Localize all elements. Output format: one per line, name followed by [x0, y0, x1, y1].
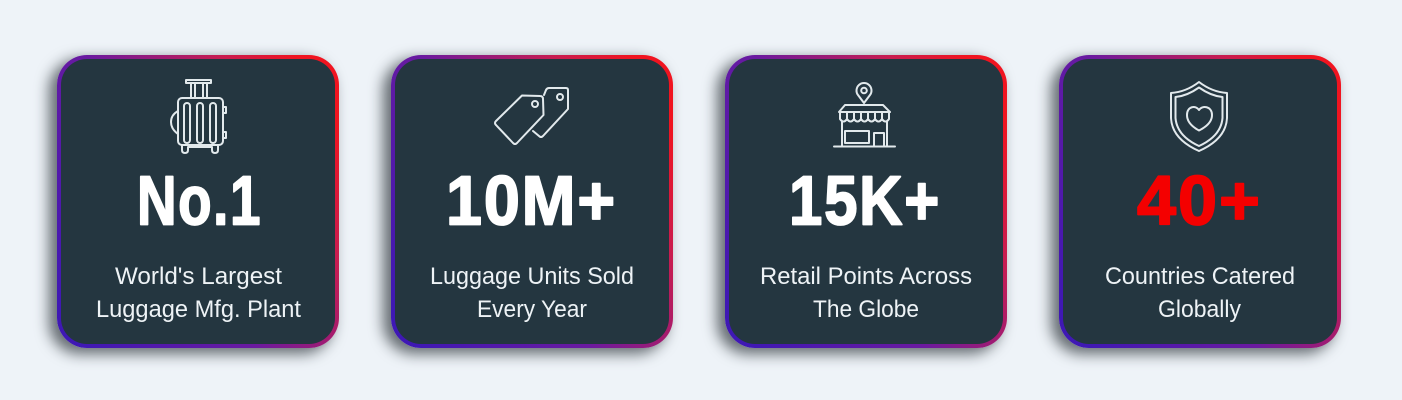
description: Globally	[1158, 296, 1241, 323]
stat: 15K+: 15K+	[789, 162, 941, 240]
card frame	[1059, 55, 1341, 348]
icon: price tags	[495, 88, 568, 144]
icon: suitcase	[171, 80, 226, 153]
icon: store with pin	[834, 83, 895, 146]
card frame	[725, 55, 1007, 348]
description: Countries Catered	[1105, 263, 1295, 290]
description: World's Largest	[115, 263, 282, 290]
panel: 40+	[1059, 55, 1341, 348]
panel: 15K+	[725, 55, 1007, 348]
stat: 10M+: 10M+	[446, 162, 617, 240]
description	[760, 263, 972, 323]
description: The Globe	[813, 296, 919, 323]
description: Luggage Mfg. Plant	[96, 296, 301, 323]
description: Retail Points Across	[760, 263, 972, 290]
panel: 10M+	[391, 55, 673, 348]
description	[1105, 263, 1295, 323]
stat: 40+: 40+	[1137, 162, 1262, 240]
description	[96, 263, 301, 323]
card body	[1063, 59, 1337, 344]
card body	[61, 59, 335, 344]
description	[430, 263, 634, 323]
stat: No.1: No.1	[137, 162, 262, 240]
description: Every Year	[477, 296, 587, 323]
description: Luggage Units Sold	[430, 263, 634, 290]
card frame	[57, 55, 339, 348]
card body	[395, 59, 669, 344]
icon: shield with heart	[1171, 82, 1227, 151]
card body	[729, 59, 1003, 344]
card frame	[391, 55, 673, 348]
panel: No.1	[57, 55, 339, 348]
